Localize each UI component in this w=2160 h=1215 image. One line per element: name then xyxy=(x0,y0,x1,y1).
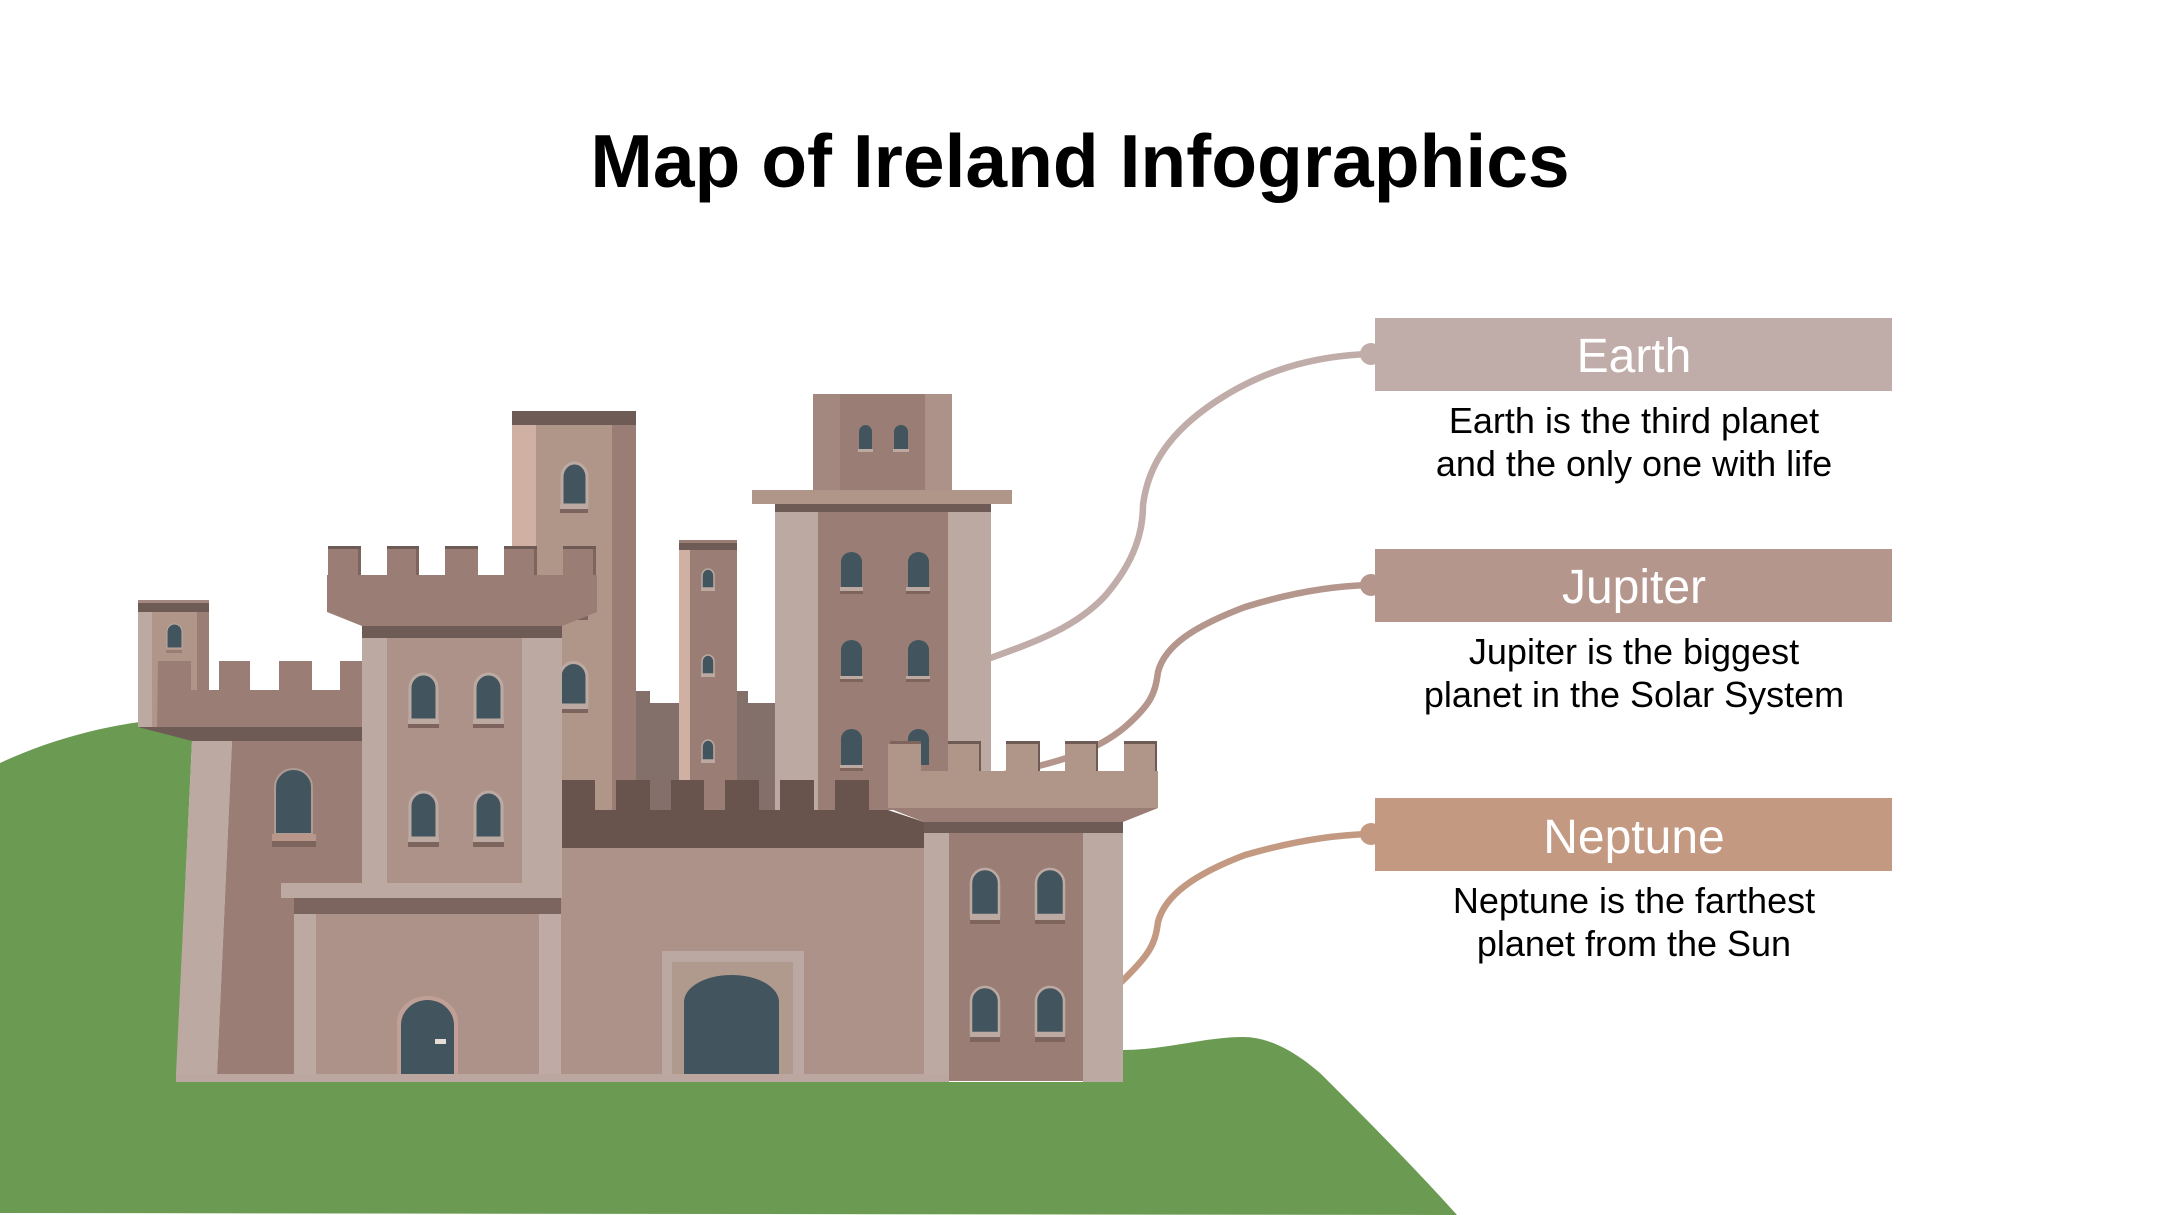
gatehouse with door xyxy=(281,883,562,1074)
title: Map of Ireland Infographics xyxy=(590,119,1570,203)
Earth description: Earth is the third planet xyxy=(1449,400,1819,441)
back curtain wall xyxy=(636,691,775,810)
panel: Earth xyxy=(1375,318,1892,484)
main curtain wall with gate xyxy=(561,848,924,1074)
panel: Neptune xyxy=(1375,798,1892,964)
Earth header xyxy=(1375,318,1892,391)
connector: Earth xyxy=(985,343,1382,660)
dark central battlement xyxy=(561,780,924,848)
Neptune header: Neptune xyxy=(1543,811,1725,864)
narrow middle tower xyxy=(679,540,737,810)
Jupiter description: planet in the Solar System xyxy=(1424,674,1844,715)
front-right tower xyxy=(888,741,1158,1082)
castle base strip xyxy=(176,1074,949,1082)
Earth description: and the only one with life xyxy=(1436,443,1832,484)
panel: Jupiter xyxy=(1375,549,1892,715)
Jupiter header: Jupiter xyxy=(1562,561,1706,614)
Neptune header xyxy=(1375,798,1892,871)
Neptune description: Neptune is the farthest xyxy=(1453,880,1815,921)
castle illustration xyxy=(138,394,1158,1082)
Jupiter description: Jupiter is the biggest xyxy=(1469,631,1799,672)
central-left tower xyxy=(362,626,562,888)
central-left tower battlement xyxy=(327,546,597,626)
green hill xyxy=(0,722,1457,1215)
connector: Neptune xyxy=(1115,823,1382,988)
small far-left turret xyxy=(138,600,209,727)
Earth header: Earth xyxy=(1577,330,1691,383)
Jupiter header xyxy=(1375,549,1892,622)
Neptune description: planet from the Sun xyxy=(1477,923,1791,964)
left battlement wall xyxy=(138,661,362,741)
tall back tower xyxy=(512,411,636,810)
left wing body xyxy=(176,741,362,1074)
right keep tower xyxy=(752,394,1012,810)
connector: Jupiter xyxy=(1000,574,1382,775)
